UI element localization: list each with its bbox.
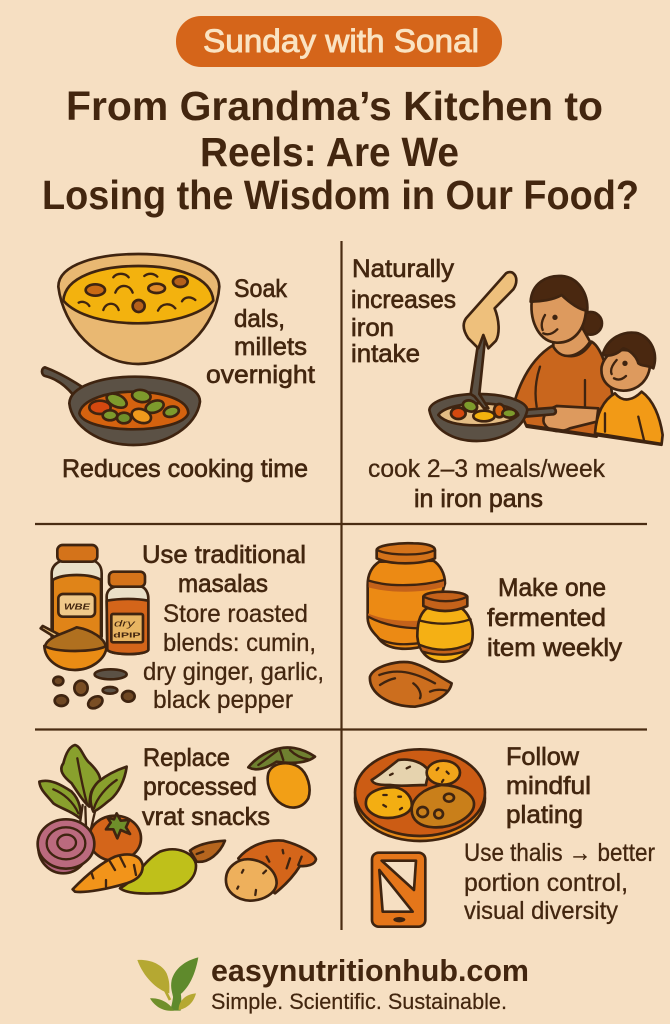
mango [120,841,225,894]
text: soak dals [206,275,315,389]
badge: Sunday with Sonal: Sunday with Sonal [203,23,479,59]
title: Losing the Wisdom in Our Food? [42,172,639,218]
text: replace processed vrat snacks: processed [143,773,257,801]
text: make one fermented item weekly [487,574,623,662]
arm [543,406,598,431]
text: use traditional masalas: Store roasted [163,600,308,628]
icon: fermentation jars and dosa [368,543,473,707]
text: make one fermented item weekly: fermented [487,604,606,632]
text: soak dals: Soak [234,275,287,303]
text: use thalis: portion control, [464,869,628,897]
small jar: dry [114,619,137,629]
title: Reels: Are We [200,129,459,175]
carrot [73,854,143,892]
panel: mindful plating [355,743,655,927]
beet [38,819,94,873]
icon: spice jars and seeds [41,545,148,711]
text: follow mindful plating: mindful [506,772,591,800]
text: use traditional masalas: dry ginger, garlic, [143,658,324,686]
text: naturally increases iron intake: increases [351,286,456,314]
icon: bowl of dal [58,254,219,364]
text: follow mindful plating [506,743,591,829]
text: use traditional masalas: black pepper [153,686,293,714]
fruit with leaves [248,748,315,808]
text: naturally increases iron intake: intake [351,340,420,368]
icon: curry pan [42,367,200,445]
text: website: easynutritionhub.com [211,953,529,988]
panel: vrat snacks [38,744,316,901]
icon: thali plate [355,749,485,841]
dosa [370,662,452,707]
badge: Sunday with Sonal [176,16,502,67]
small jar [417,592,473,662]
large jar: WBE [64,601,90,611]
text: replace processed vrat snacks [142,744,270,831]
text: replace processed vrat snacks: Replace [143,744,230,772]
pan [429,394,556,441]
sweet potato [226,840,316,901]
panel: traditional masalas [41,541,324,714]
panel: soak dals [42,254,315,483]
text: make one fermented item weekly: item weekly [487,634,623,662]
beet greens [39,745,127,830]
text: use traditional masalas: masalas [178,570,268,598]
large jar [368,543,445,649]
text: use thalis [464,839,655,925]
tomato [89,813,141,861]
text: soak dals: overnight [206,361,315,389]
text: naturally increases iron intake: iron [351,314,394,342]
seeds [53,669,135,711]
text: tagline: Simple. Scientific. Sustainable. [211,989,507,1014]
icon: vegetables and fruit [38,745,316,901]
grid dividers [35,241,647,930]
panel: iron pans [351,255,663,513]
text: replace processed vrat snacks: vrat snacks [142,803,270,831]
illustration: mother and child cooking [429,272,663,445]
text: use thalis: visual diversity [464,897,618,925]
title [42,83,639,218]
text: naturally increases iron intake [351,255,456,368]
small jar [107,572,148,654]
title: From Grandma’s Kitchen to [66,83,603,129]
text: naturally increases iron intake: Naturally [352,255,455,283]
hand [464,272,516,348]
text: reduces cooking time: Reduces cooking time [62,455,308,483]
small jar: dPIP [113,630,141,639]
text: follow mindful plating: Follow [506,743,580,771]
footer: logo and tagline [137,953,529,1014]
child [595,333,663,444]
text: use traditional masalas [142,541,324,714]
woman [515,276,613,437]
icon: leaf logo [137,957,198,1011]
large jar [52,545,102,638]
icon: crossed-out phone [372,853,425,927]
spice bowl [41,626,107,670]
text: make one fermented item weekly: Make one [498,574,606,602]
text: cook 2-3 meals per week: cook 2–3 meals/week [368,455,605,483]
text: soak dals: dals, [234,305,285,333]
text: follow mindful plating: plating [506,801,583,829]
text: cook 2-3 meals per week: in iron pans [414,485,543,513]
text: soak dals: millets [234,333,307,361]
text: cook 2-3 meals per week [368,455,605,513]
text: use traditional masalas: blends: cumin, [163,629,316,657]
text: use traditional masalas: Use traditional [142,541,306,569]
spatula [471,335,488,408]
panel: fermented item [368,543,623,707]
